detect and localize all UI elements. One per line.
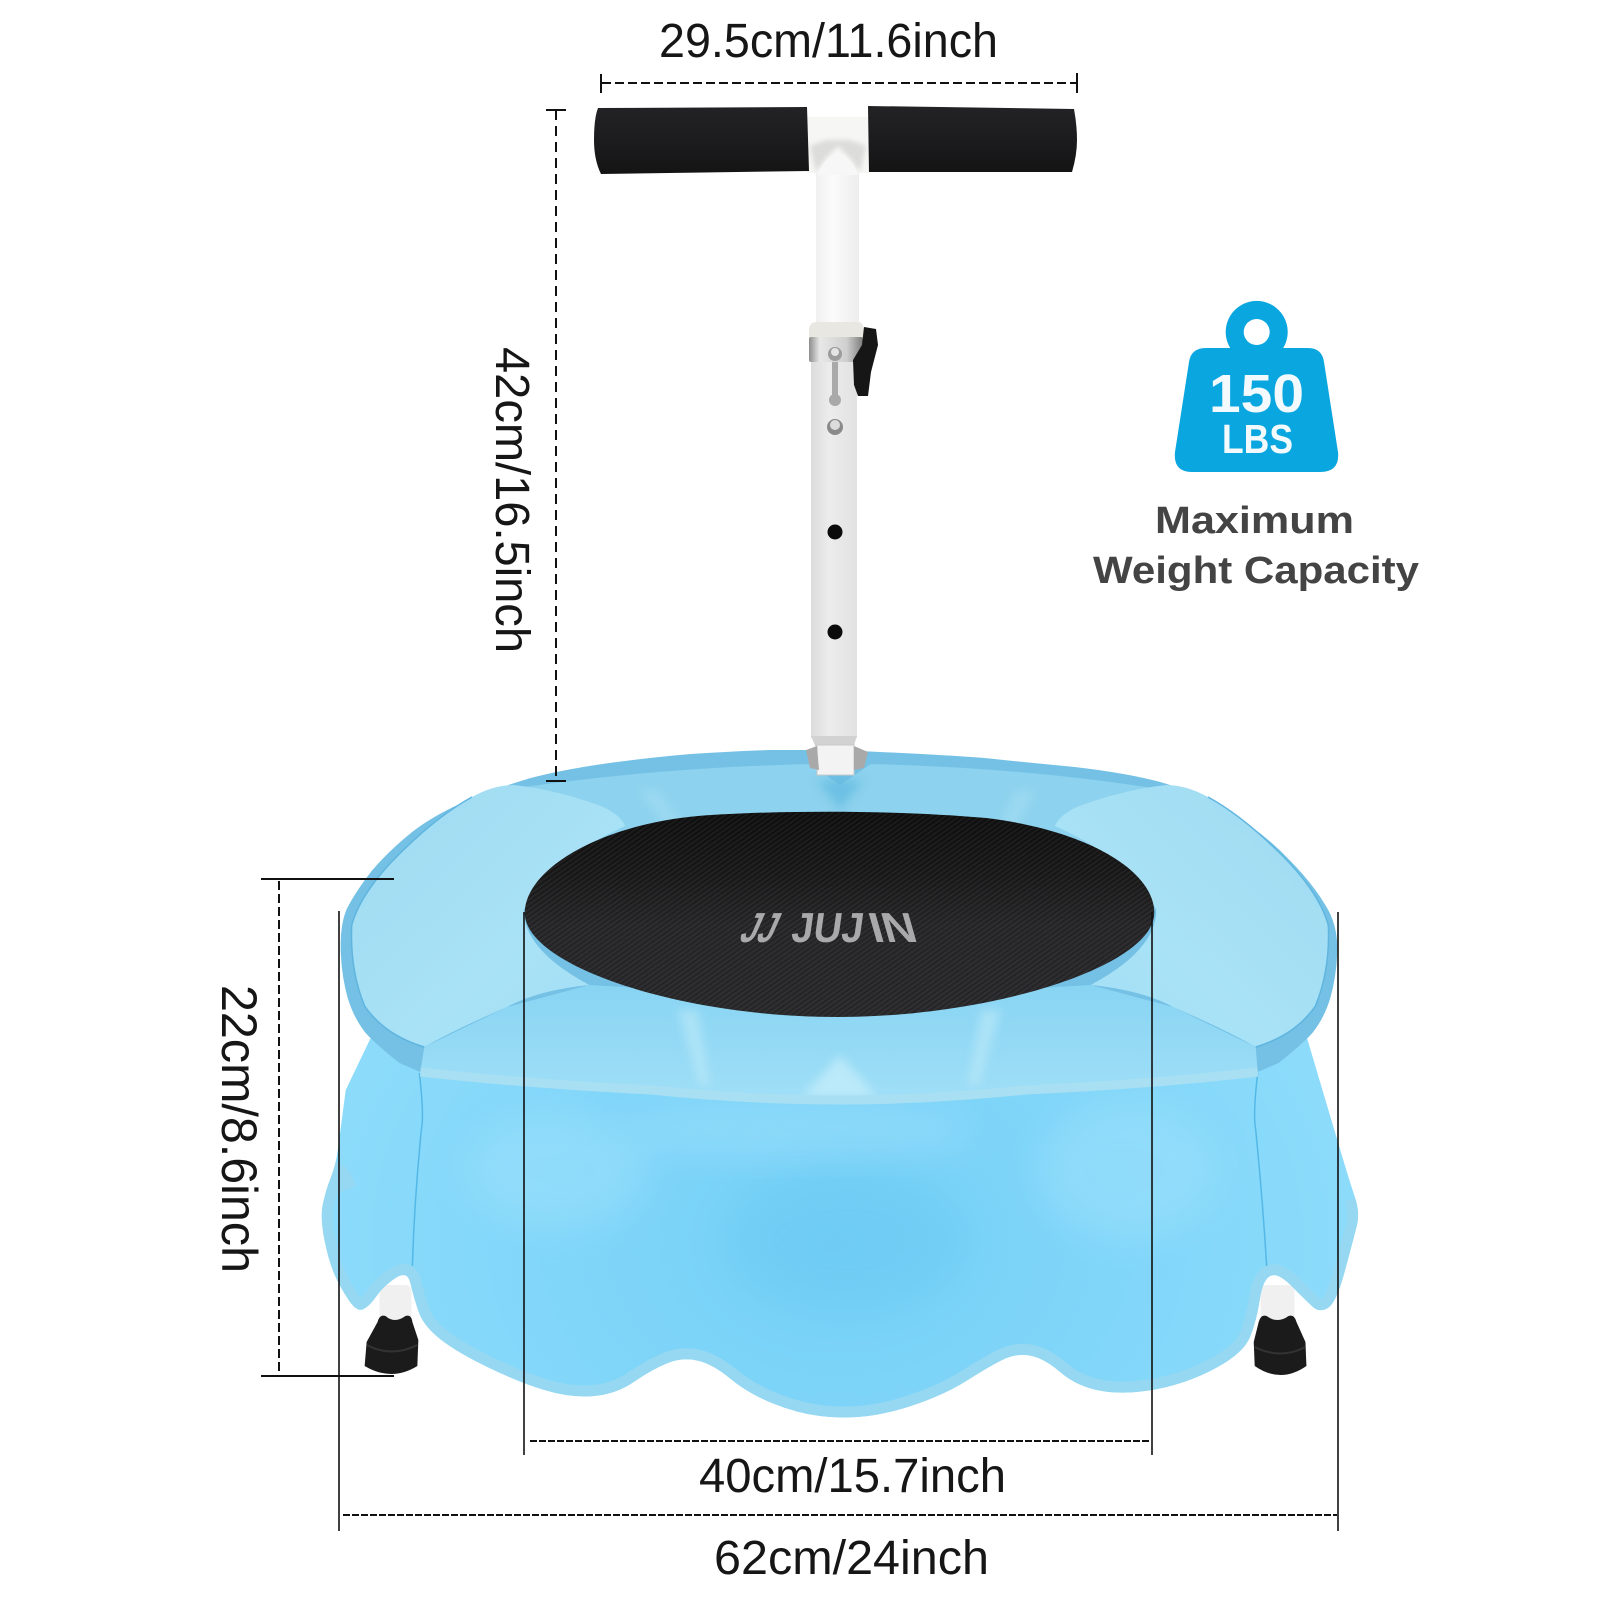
corner pad right — [1055, 785, 1329, 1047]
dimension: frame height: 22cm/8.6inch — [211, 985, 267, 1273]
slot — [829, 362, 841, 406]
capacity caption — [1093, 500, 1419, 592]
right grip — [868, 106, 1077, 172]
corner pad left — [351, 785, 625, 1047]
padded top cover — [341, 750, 1337, 1100]
rivet — [827, 419, 843, 435]
dimension: mat diameter: 40cm/15.7inch — [699, 1450, 1006, 1503]
trampoline body — [322, 750, 1358, 1418]
jumping mat — [525, 812, 1154, 1017]
capacity caption: Weight Capacity — [1093, 550, 1419, 592]
trampoline product — [322, 106, 1358, 1418]
front panel — [420, 985, 1258, 1100]
back panel — [504, 764, 1177, 900]
logo: JJ — [733, 905, 788, 952]
foot: right rubber leg — [1254, 1285, 1306, 1375]
LBS: LBS — [1222, 416, 1293, 462]
left grip — [594, 107, 809, 174]
collar — [809, 322, 864, 362]
foot: left rubber leg — [365, 1285, 418, 1374]
pole base — [806, 745, 868, 775]
T junction — [807, 117, 869, 175]
handle assembly — [594, 106, 1077, 775]
dimension: overall diameter: 62cm/24inch — [714, 1532, 989, 1585]
logo: IN — [863, 905, 922, 952]
logo: JUJ — [789, 904, 867, 951]
150: 150 — [1209, 364, 1304, 424]
lower pole — [811, 355, 857, 738]
dimension: handle height: 42cm/16.5inch — [485, 347, 538, 653]
skirt — [322, 1036, 1358, 1418]
seam band — [420, 1072, 1258, 1100]
capacity caption: Maximum — [1155, 500, 1354, 542]
lever — [853, 327, 878, 396]
weight capacity icon — [1175, 301, 1338, 472]
adjustment holes — [828, 524, 842, 640]
upper pole — [816, 165, 859, 325]
dimension: handle width: 29.5cm/11.6inch — [659, 15, 998, 68]
logo — [733, 904, 922, 952]
hem stitching — [351, 797, 1329, 1047]
